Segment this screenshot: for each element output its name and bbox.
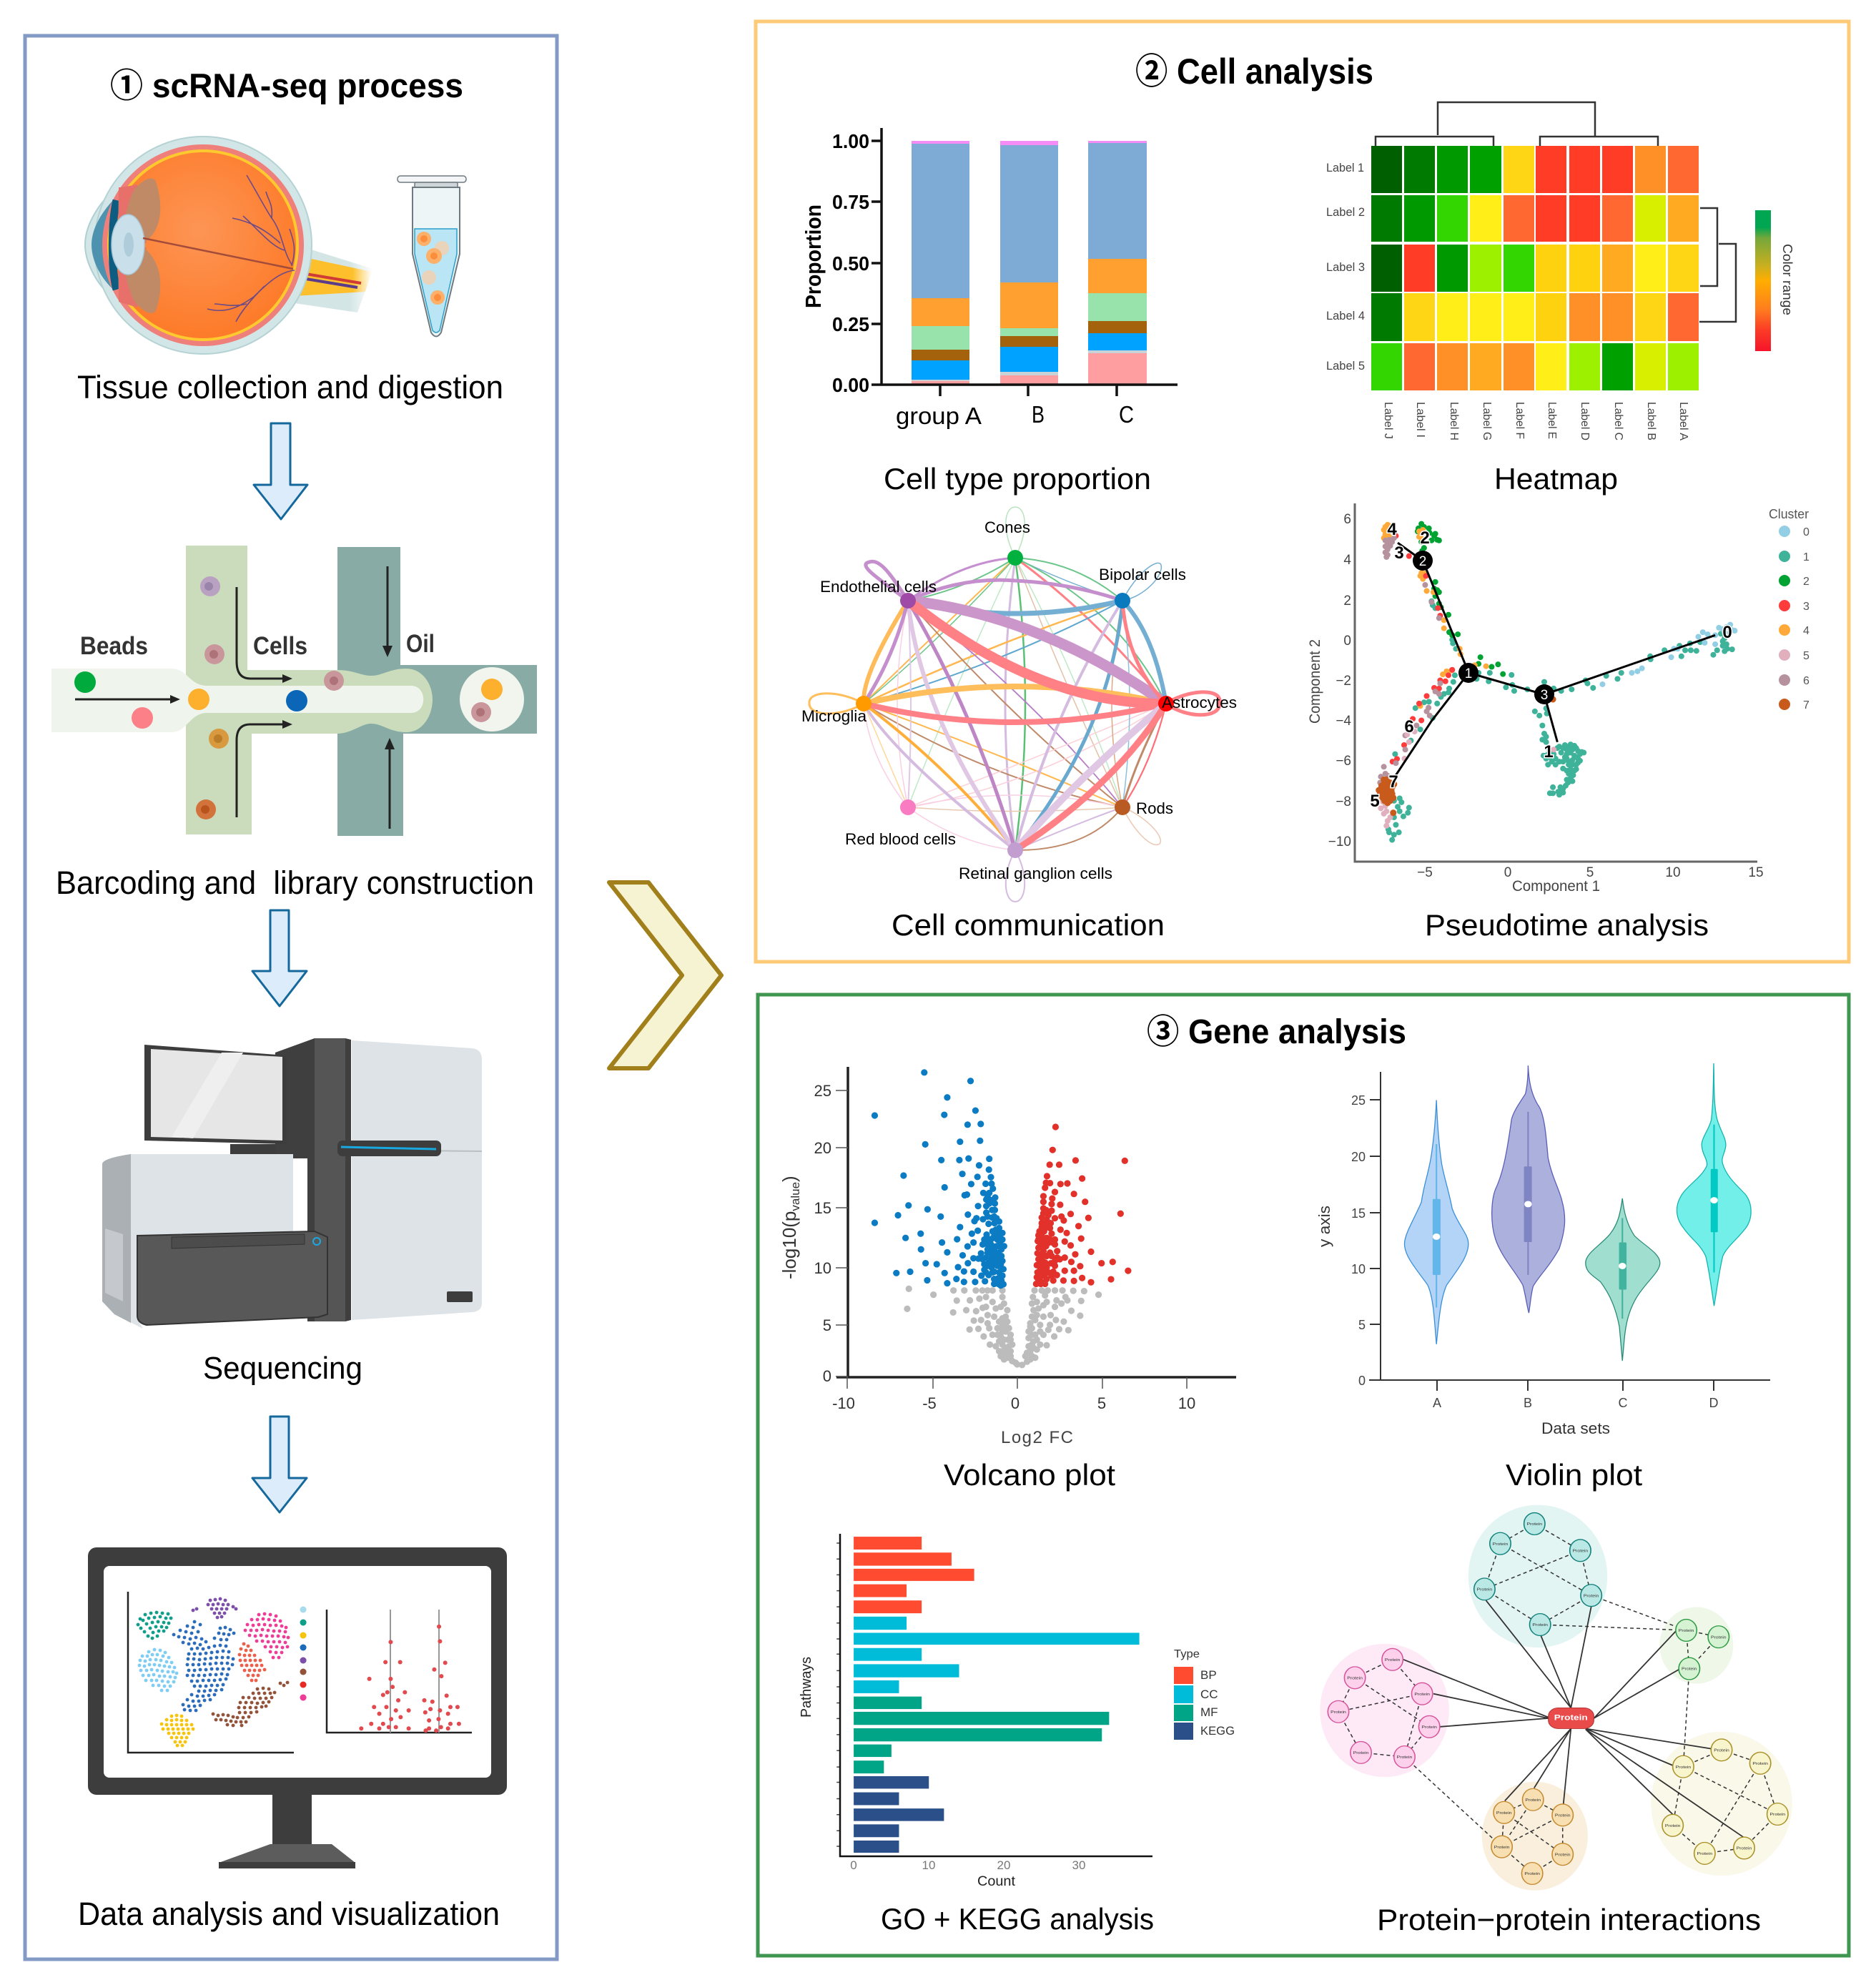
chart: volcano plot: -log10(p [779,1211,800,1279]
chart: stacked bar proportions: Proportion [801,205,826,308]
chart: heatmap: Label 4 [1326,309,1365,322]
violin: D [1677,1063,1751,1306]
legend: cluster: Cluster [1769,507,1809,521]
legend: pathway type [1174,1648,1235,1740]
diagram: protein-protein interaction network: Protein [1385,1658,1401,1663]
chart: volcano plot: 5 [823,1316,831,1334]
legend: pathway type: MF [1200,1705,1218,1719]
chart: violin plot: 15 [1351,1206,1366,1221]
chart: stacked bar proportions: 0.75 [832,191,869,213]
chart: volcano plot: 10 [1178,1394,1195,1412]
arrow: step 3 to 4 [252,1417,307,1512]
chart: pseudotime trajectory: 0 [1343,634,1351,649]
chart: pseudotime trajectory: 6 [1343,512,1351,527]
chart: GO and KEGG bar chart: Count [977,1874,1016,1889]
chart: pseudotime trajectory: 15 [1748,865,1764,880]
chart: cell communication network: Endothelial cells [820,578,937,596]
chart: pseudotime trajectory: 0 [1722,623,1732,642]
chart: pseudotime trajectory: 2 [1343,593,1351,609]
chart: GO and KEGG bar chart: 0 [850,1858,857,1872]
chart: violin plot: A [1433,1396,1441,1410]
diagram: droplet microfluidics [51,546,537,836]
chart: volcano plot: 0 [823,1367,831,1385]
heading: cell analysis: ② Cell analysis [1135,51,1373,92]
diagram: protein-protein interaction network: Protein [1555,1813,1571,1818]
chart: GO and KEGG bar chart: Pathways [799,1657,814,1718]
panel: scRNA-seq process [25,36,557,1959]
legend: cluster: 3 [1803,601,1810,613]
chart: cell communication network: Cones [984,518,1030,536]
diagram: protein-protein interaction network: Protein [1752,1761,1768,1766]
icon: computer monitor with plots [88,1547,507,1868]
chart: violin plot: 10 [1351,1262,1366,1276]
diagram: protein-protein interaction network: Protein [1421,1725,1438,1730]
panel: cell analysis [756,21,1849,962]
chart: volcano plot: 10 [814,1259,831,1277]
legend: pathway type: KEGG [1200,1724,1235,1738]
chart: violin plot: Data sets [1541,1419,1610,1437]
chart: stacked bar proportions: C [1119,401,1134,428]
diagram: protein-protein interaction network: Protein [1496,1811,1512,1816]
label: Beads: Beads [80,632,148,660]
chart: volcano plot: value [789,1182,802,1211]
chart: volcano plot: 15 [814,1199,831,1217]
chart: pseudotime trajectory: −6 [1336,754,1351,769]
diagram: protein-protein interaction network: Protein [1353,1751,1369,1755]
chart: volcano plot: -5 [922,1394,937,1412]
caption: barcoding: Barcoding and library construction [56,865,534,901]
chart: cell communication network: Rods [1136,799,1173,817]
diagram: protein-protein interaction network: Protein [1697,1852,1713,1856]
chart: GO and KEGG bar chart: 20 [997,1858,1010,1872]
chart: stacked bar proportions: 0.25 [832,313,869,335]
diagram: protein-protein interaction network: Protein [1477,1587,1493,1592]
caption: sequencing: Sequencing [203,1351,362,1386]
chart: pseudotime trajectory: 7 [1388,772,1398,792]
caption: violin plot: Violin plot [1506,1458,1642,1492]
diagram: protein-protein interaction network: Protein [1525,1798,1541,1803]
violin: B [1492,1065,1565,1313]
diagram: protein-protein interaction network: Protein [1397,1755,1413,1760]
chart: violin plot: 20 [1351,1150,1366,1164]
chart: cell communication network [801,507,1237,902]
diagram: protein-protein interaction network: Protein [1331,1710,1346,1715]
chart: heatmap: Label 5 [1326,359,1365,373]
diagram: protein-protein interaction network: Protein [1676,1765,1692,1770]
chart: pseudotime trajectory: −8 [1336,794,1351,809]
chart: heatmap: Label D [1579,402,1591,440]
chart: pseudotime trajectory: 2 [1420,528,1430,548]
chart: volcano plot: ) [779,1176,800,1182]
heading: gene analysis: ③ Gene analysis [1147,1013,1406,1051]
chart: pseudotime trajectory: 3 [1394,543,1404,563]
chart: cell communication network: Bipolar cells [1099,566,1186,583]
chart: cell communication network: Retinal ganglion cells [959,865,1112,882]
chart: heatmap: Label A [1677,402,1689,440]
chart: volcano plot: Log2 FC [1001,1428,1073,1447]
hub protein node [1549,1708,1594,1728]
chart: volcano plot: 20 [814,1139,831,1157]
diagram: protein-protein interaction network: Protein [1737,1846,1752,1851]
chart: violin plot [1315,1063,1770,1437]
chart: pseudotime trajectory: 5 [1370,792,1380,811]
chart: violin plot: C [1619,1396,1627,1410]
chart: violin plot: D [1709,1396,1719,1410]
caption: tissue collection: Tissue collection and digestion [77,369,503,405]
caption: cell communication: Cell communication [892,908,1165,942]
caption: GO and KEGG: GO + KEGG analysis [881,1902,1154,1936]
caption: volcano plot: Volcano plot [944,1458,1115,1492]
heading: scRNA-seq process: ① scRNA-seq process [110,67,463,104]
caption: protein-protein interactions: Protein−protein interactions [1377,1903,1761,1936]
chart: pseudotime trajectory: 4 [1387,520,1397,539]
label: Cells: Cells [253,632,307,660]
chart: heatmap: Label 3 [1326,260,1365,274]
panel: gene analysis [758,995,1849,1956]
chart: pseudotime trajectory: 6 [1404,717,1414,737]
legend: cluster: 7 [1803,699,1810,711]
chart: pseudotime trajectory: Component 1 [1512,878,1600,895]
caption: pseudotime analysis: Pseudotime analysis [1425,908,1709,942]
chart: cell communication network: Microglia [801,707,867,725]
legend: cluster: 4 [1803,625,1810,637]
chart: volcano plot [779,1067,1236,1447]
chart: volcano plot: 25 [814,1082,831,1100]
legend: cluster: 2 [1803,576,1810,588]
chart: violin plot: 0 [1358,1374,1366,1388]
icon: microcentrifuge tube [398,176,466,336]
chart: pseudotime trajectory: 1 [1465,666,1472,681]
diagram: protein-protein interaction network: Protein [1682,1667,1697,1672]
caption: data analysis: Data analysis and visualization [78,1896,500,1932]
chart: heatmap: Label 1 [1326,161,1364,174]
chart: stacked bar proportions: B [1032,401,1045,428]
legend: cluster: 6 [1803,675,1810,687]
chart: stacked bar proportions [801,128,1178,429]
diagram: protein-protein interaction network: Protein [1714,1748,1729,1753]
chart: heatmap: Label I [1414,402,1426,438]
chart: pseudotime trajectory [1307,503,1810,895]
chart: heatmap [1326,102,1794,440]
chart: pseudotime trajectory: 10 [1665,865,1681,880]
chart: violin plot: y axis [1315,1206,1333,1247]
chart: pseudotime trajectory: −2 [1336,674,1351,689]
legend: cluster: 5 [1803,650,1810,662]
chart: heatmap: Label F [1514,402,1526,439]
chart: pseudotime trajectory: 1 [1544,742,1554,762]
chart: stacked bar proportions: 0.50 [832,252,869,275]
diagram: protein-protein interaction network: Protein [1555,1853,1571,1857]
legend: cluster [1769,507,1810,711]
chart: volcano plot: 5 [1097,1394,1106,1412]
chart: heatmap: Label G [1481,402,1493,440]
violin: C [1586,1198,1660,1361]
legend: cluster: 0 [1803,526,1810,538]
chart: pseudotime trajectory: −10 [1328,834,1351,849]
chart: stacked bar proportions: 1.00 [832,130,869,152]
chart: pseudotime trajectory: 2 [1419,554,1426,569]
chart: heatmap: Color range [1780,244,1794,315]
chart: pseudotime trajectory: 4 [1343,553,1351,568]
chart: pseudotime trajectory: −4 [1336,714,1351,729]
diagram: protein-protein interaction network: Protein [1527,1522,1543,1527]
caption: heatmap: Heatmap [1494,462,1618,496]
diagram: protein-protein interaction network [1320,1505,1792,1891]
arrow: chevron to results [609,882,721,1068]
violin: A [1404,1100,1468,1344]
diagram: protein-protein interaction network: Protein [1494,1845,1510,1850]
chart: volcano plot: 0 [1011,1394,1020,1412]
chart: GO and KEGG bar chart: 30 [1072,1858,1085,1872]
arrow: step 2 to 3 [252,910,307,1006]
chart: cell communication network: Astrocytes [1162,694,1237,711]
chart: pseudotime trajectory: −5 [1417,865,1433,880]
legend: pathway type: CC [1200,1688,1218,1701]
chart: pseudotime trajectory: 3 [1541,688,1548,703]
legend: pathway type: Type [1174,1648,1200,1660]
icon: sequencer [102,1038,482,1329]
chart: violin plot: 5 [1358,1318,1366,1332]
diagram: protein-protein interaction network: Protein [1532,1623,1549,1627]
chart: violin plot: 25 [1351,1093,1366,1108]
chart: heatmap: Label 2 [1326,205,1365,219]
chart: pseudotime trajectory: 5 [1586,865,1594,880]
diagram: protein-protein interaction network: Protein [1414,1692,1431,1697]
chart: pseudotime trajectory: 0 [1504,865,1511,880]
chart: heatmap: Label E [1546,402,1558,439]
diagram: protein-protein interaction network: Protein [1493,1542,1509,1547]
hub protein node: Protein [1554,1713,1588,1722]
caption: cell type proportion: Cell type proportion [884,462,1151,496]
chart: volcano plot: -10 [832,1394,855,1412]
chart: violin plot: B [1524,1396,1532,1410]
diagram: protein-protein interaction network: Protein [1770,1813,1786,1817]
chart: heatmap: Label B [1645,402,1657,440]
diagram: protein-protein interaction network: Protein [1524,1872,1540,1876]
diagram: protein-protein interaction network: Protein [1584,1594,1599,1598]
chart: stacked bar proportions: 0.00 [832,374,869,396]
chart: cell communication network: Red blood cells [845,830,956,848]
diagram: protein-protein interaction network: Protein [1711,1635,1727,1640]
chart: heatmap: Label J [1382,402,1394,439]
icon: eye anatomy [85,137,373,354]
chart: GO and KEGG bar chart: 10 [922,1858,935,1872]
legend: cluster: 1 [1803,551,1810,563]
chart: GO and KEGG bar chart [799,1534,1235,1889]
arrow: step 1 to 2 [254,423,307,519]
legend: pathway type: BP [1200,1668,1217,1682]
diagram: protein-protein interaction network: Protein [1679,1629,1694,1633]
diagram: protein-protein interaction network: Protein [1347,1676,1363,1680]
chart: heatmap: Label H [1448,402,1460,440]
diagram: protein-protein interaction network: Protein [1665,1823,1681,1828]
chart: heatmap: Label C [1612,402,1624,440]
chart: stacked bar proportions: group A [896,403,982,429]
diagram: protein-protein interaction network: Protein [1573,1549,1589,1553]
chart: pseudotime trajectory: Component 2 [1307,639,1323,724]
label: Oil: Oil [406,630,435,658]
